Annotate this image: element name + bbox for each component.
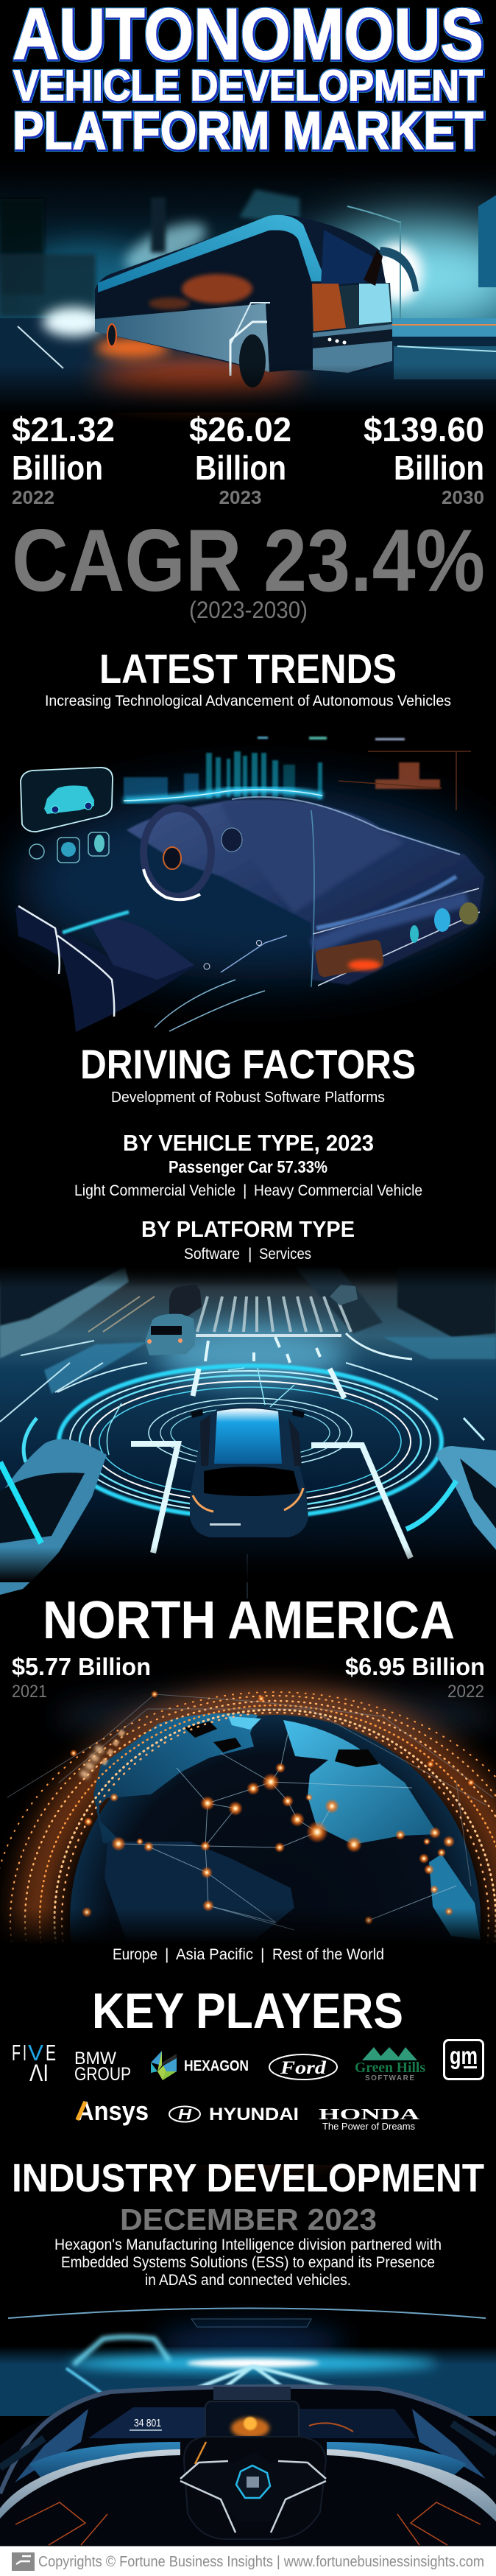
illustration: car with sensor rings at intersection: [0, 1266, 496, 1598]
logo: Five AI: F: [12, 2040, 21, 2066]
stat: 2030 market size: Billion: [394, 449, 484, 487]
segment: by platform type: BY PLATFORM TYPE: [141, 1216, 355, 1242]
stat: 2023 market size: Billion: [195, 449, 286, 487]
logo: Five AI: ΛI: [29, 2060, 49, 2086]
right parked car: [436, 1446, 496, 1550]
CAGR figure: (2023-2030): [189, 597, 308, 623]
logo: Honda: [319, 2105, 420, 2132]
logo: BMW Group: [74, 2049, 131, 2085]
segment: by vehicle type: Heavy Commercial Vehicle: [254, 1182, 422, 1199]
logo: Honda: The Power of Dreams: [322, 2121, 415, 2132]
segment: by vehicle type: Passenger Car 57.33%: [169, 1157, 327, 1176]
steering wheel: [180, 2437, 326, 2539]
heading: key players: KEY PLAYERS: [92, 1983, 403, 2039]
side windows: [15, 2409, 88, 2482]
parking bay lines: [131, 1337, 411, 1558]
section: driving factors: Development of Robust Software Platforms: [111, 1089, 385, 1106]
left parked car: [0, 1439, 107, 1595]
stat: north america 2021: $5.77 Billion: [12, 1653, 151, 1680]
dashboard body: [127, 800, 484, 985]
segment: by vehicle type: |: [243, 1182, 247, 1199]
heading: latest trends: [45, 645, 451, 709]
logo: Hyundai: H: [178, 2107, 192, 2123]
logo: Ford: Ford: [280, 2058, 327, 2078]
blue band: [29, 2442, 467, 2477]
illustration: holographic car dashboard: [15, 737, 496, 1032]
segment: by platform type: Software: [184, 1246, 240, 1263]
right display: [299, 2409, 417, 2438]
other regions list: |: [261, 1946, 264, 1963]
section: industry development: DECEMBER 2023: [120, 2203, 377, 2236]
floor accents: [15, 2502, 481, 2545]
network links: [118, 1731, 456, 1930]
logo: Hyundai: HYUNDAI: [209, 2105, 299, 2124]
left display: [88, 2407, 205, 2438]
car screen panel: [21, 768, 113, 832]
illustration: futuristic cockpit: [0, 2309, 496, 2546]
heading: north america: NORTH AMERICA: [43, 1591, 455, 1650]
logo: Green Hills Software: SOFTWARE: [365, 2074, 414, 2082]
logo: Five AI: I: [23, 2040, 26, 2066]
illustration: electric bus in city: [0, 155, 496, 413]
footer logo: [12, 2552, 35, 2571]
stat: 2022 market size: Billion: [12, 449, 103, 487]
section: industry development: Hexagon's Manufacturing Intelligence division partnered with: [54, 2236, 442, 2253]
stat: north america 2021: 2021: [12, 1682, 47, 1702]
logo: Five AI: E: [46, 2040, 56, 2066]
section: industry development: [12, 2156, 484, 2289]
logo: GM: gm: [450, 2042, 478, 2069]
orbital light trails: [0, 1692, 496, 2149]
left display: 34 801: [134, 2417, 161, 2429]
center screen: [205, 2401, 299, 2442]
other regions list: Rest of the World: [272, 1946, 384, 1963]
segment: by vehicle type: BY VEHICLE TYPE, 2023: [123, 1130, 374, 1156]
segment: by vehicle type: Light Commercial Vehicle: [74, 1182, 235, 1199]
section: industry development: Embedded Systems Solutions (ESS) to expand its Presence: [61, 2254, 435, 2271]
section: driving factors: DRIVING FACTORS: [80, 1041, 416, 1087]
logo: Hexagon: HEXAGON: [184, 2058, 249, 2074]
section: industry development: in ADAS and connected vehicles.: [145, 2272, 351, 2289]
logo: BMW Group: GROUP: [74, 2064, 131, 2085]
stat: north america 2022: $6.95 Billion: [345, 1653, 485, 1680]
logo: Green Hills Software: [355, 2047, 425, 2082]
heading: latest trends: LATEST TRENDS: [99, 645, 397, 692]
other regions list: |: [165, 1946, 169, 1963]
bus body: [95, 215, 419, 387]
main car: [190, 1407, 308, 1537]
logo: Green Hills Software: Green Hills: [355, 2060, 425, 2076]
main title: [13, 0, 483, 161]
stat: 2022 market size: 2022: [12, 488, 54, 508]
logo: Hexagon: [151, 2051, 249, 2080]
illustration: connected globe: [0, 1643, 496, 2165]
stat: north america 2022: [345, 1653, 485, 1702]
logo: Hyundai: [169, 2105, 299, 2124]
logo: Five AI: V: [28, 2040, 43, 2066]
stat: 2030 market size: [364, 410, 484, 508]
seat: [15, 908, 196, 1032]
logo: Honda: HONDA: [319, 2105, 420, 2123]
logo: BMW Group: BMW: [74, 2049, 116, 2068]
stat: north america 2021: [12, 1653, 151, 1702]
logo: Five AI: [12, 2040, 56, 2086]
heading: latest trends: Increasing Technological Advancement of Autonomous Vehicles: [45, 693, 451, 709]
stat: 2030 market size: 2030: [442, 488, 484, 508]
other regions list: Europe: [113, 1946, 157, 1963]
stat: 2023 market size: 2023: [219, 488, 262, 508]
logo: Ansys: Ansys: [77, 2096, 149, 2126]
city lights: [70, 1691, 475, 1925]
other regions list: [113, 1946, 384, 1963]
globe landmasses: [93, 1713, 481, 1941]
stat: 2030 market size: $139.60: [364, 410, 484, 449]
stat: 2023 market size: [189, 410, 291, 508]
stat: north america 2022: 2022: [447, 1682, 484, 1702]
other regions list: Asia Pacific: [176, 1946, 253, 1963]
stat: 2022 market size: [12, 410, 115, 508]
distant vehicles: [145, 1285, 358, 1355]
logo: GM: [444, 2040, 483, 2079]
stat: 2023 market size: $26.02: [189, 410, 291, 449]
section: driving factors: [80, 1041, 416, 1106]
footer bar: [0, 2546, 496, 2576]
segment: by platform type: [141, 1216, 355, 1263]
stat: 2022 market size: $21.32: [12, 410, 115, 449]
segment: by platform type: Services: [259, 1246, 311, 1263]
logo: Ford: [269, 2054, 337, 2080]
segment: by vehicle type: [74, 1130, 422, 1199]
sensor rings: [24, 1366, 484, 1517]
dash frame: [0, 2387, 496, 2546]
silver strip: [0, 2449, 180, 2519]
segment: by platform type: |: [248, 1246, 252, 1263]
steering wheel: [144, 808, 211, 899]
